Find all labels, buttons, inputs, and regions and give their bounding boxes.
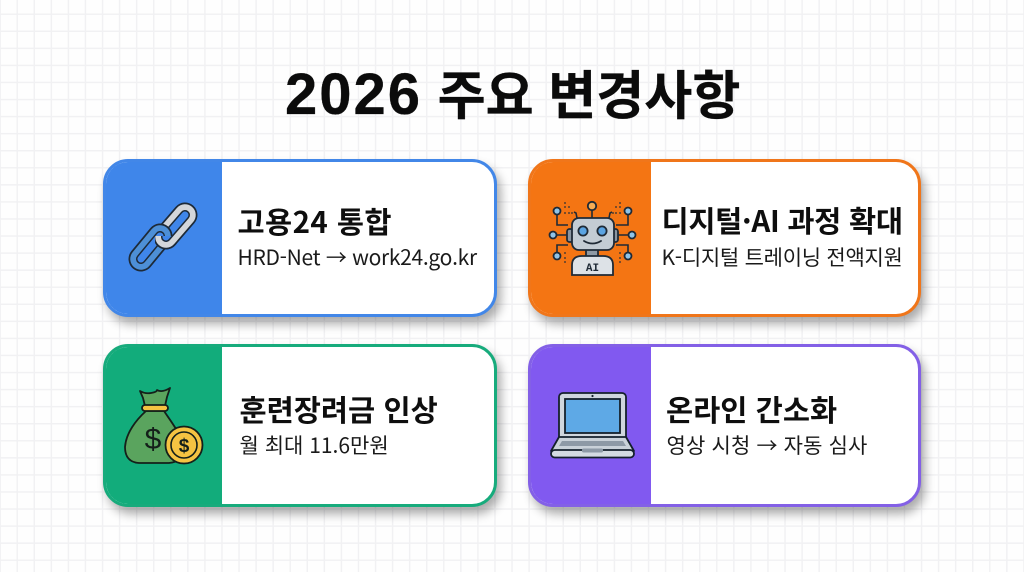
heading: 온라인 간소화 bbox=[666, 388, 837, 430]
icon: AI robot bbox=[548, 200, 636, 276]
subtext: 월 최대 11.6만원 bbox=[240, 430, 389, 460]
icon: money bag and coin bbox=[124, 387, 204, 464]
heading: 디지털·AI 과정 확대 bbox=[662, 199, 903, 241]
heading: 고용24 통합 bbox=[238, 200, 392, 242]
icon panel: orange bbox=[526, 158, 650, 318]
panel: 훈련장려금 인상 bbox=[102, 344, 497, 506]
title: 2026 주요 변경사항 bbox=[285, 54, 740, 130]
subtext: K-디지털 트레이닝 전액지원 bbox=[662, 242, 903, 272]
icon: laptop bbox=[550, 392, 635, 458]
icon: chain link bbox=[128, 202, 198, 272]
panel: 온라인 간소화 bbox=[528, 344, 921, 506]
icon panel: purple bbox=[526, 343, 650, 508]
panel: 디지털·AI 과정 확대 bbox=[528, 159, 921, 316]
icon: AI robot: AI bbox=[585, 262, 599, 274]
subtext: 영상 시청 → 자동 심사 bbox=[666, 430, 868, 460]
icon panel: blue bbox=[102, 158, 222, 318]
icon panel: green bbox=[102, 343, 222, 508]
icon: money bag and coin: $ bbox=[144, 422, 161, 456]
icon: money bag and coin: $ bbox=[178, 436, 189, 456]
subtext: HRD-Net → work24.go.kr bbox=[238, 242, 477, 272]
panel: 고용24 통합 bbox=[102, 159, 497, 316]
heading: 훈련장려금 인상 bbox=[240, 388, 438, 430]
